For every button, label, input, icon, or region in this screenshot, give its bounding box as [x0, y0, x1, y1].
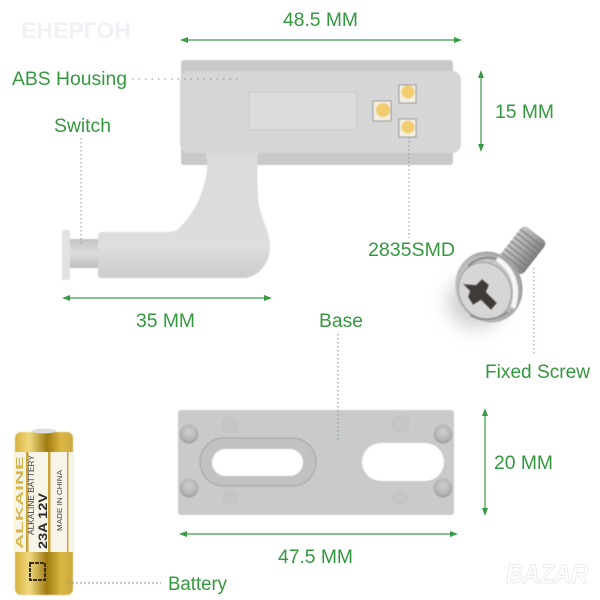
right slot hole: [362, 443, 444, 481]
battery: ALKALINE BATTERY: [27, 454, 36, 535]
screw: [444, 224, 547, 334]
back plate: [181, 60, 453, 165]
label: 47.5 MM: 47.5 MM: [278, 547, 353, 568]
dimension arrow: 48.5 MM: [180, 37, 462, 43]
screw shadow: [448, 276, 504, 328]
leader: Battery: [68, 582, 161, 584]
battery body: [15, 432, 73, 595]
leader: Fixed Screw: [533, 268, 535, 356]
screw thread: [498, 224, 547, 276]
leader: Switch: [80, 138, 82, 246]
arm: [98, 150, 270, 278]
display window: [249, 92, 357, 130]
label: 15 MM: 15 MM: [495, 102, 554, 123]
plunger: [70, 239, 100, 268]
battery: MADE IN CHINA: [55, 470, 64, 531]
watermark: ЕНЕРГОН: ЕНЕРГОН: [21, 18, 131, 43]
base plate: [178, 410, 454, 515]
label: 2835SMD: 2835SMD: [368, 240, 455, 261]
label: Battery: Battery: [168, 574, 227, 595]
LED top: [399, 85, 416, 103]
label: Fixed Screw: Fixed Screw: [485, 362, 590, 383]
button cap: [62, 230, 70, 280]
mounting bumps: [180, 424, 452, 498]
LED bottom: [399, 119, 416, 137]
dimension arrow: 35 MM: [62, 295, 272, 301]
label: ABS Housing: ABS Housing: [12, 69, 127, 90]
screw head: [444, 240, 534, 334]
battery label: [15, 452, 73, 552]
dimension arrow: 20 MM: [482, 408, 488, 516]
dimension arrow: 47.5 MM: [179, 531, 458, 537]
recessed slot: [200, 438, 316, 486]
battery top cap: [32, 428, 56, 434]
watermark: BAZAR: BAZAR: [506, 559, 588, 589]
label: Base: Base: [319, 311, 363, 332]
battery: [15, 428, 73, 595]
faint dimples: [222, 416, 409, 504]
logo square: [30, 563, 45, 580]
leader: ABS Housing: [132, 78, 238, 80]
LED left: [373, 101, 391, 121]
battery text: ALKAINE: [15, 455, 26, 549]
hinge light unit: [62, 60, 461, 280]
leader: 2835SMD: [408, 137, 410, 238]
leader: Base: [337, 334, 339, 442]
dimension arrow: 15 MM: [478, 70, 484, 152]
label: Switch: Switch: [54, 116, 111, 137]
label: 35 MM: 35 MM: [136, 311, 195, 332]
battery: 23A 12V: [36, 493, 50, 549]
label: 48.5 MM: 48.5 MM: [283, 10, 358, 31]
left slot hole: [212, 449, 303, 476]
front panel: [180, 71, 461, 153]
label: 20 MM: 20 MM: [494, 453, 553, 474]
